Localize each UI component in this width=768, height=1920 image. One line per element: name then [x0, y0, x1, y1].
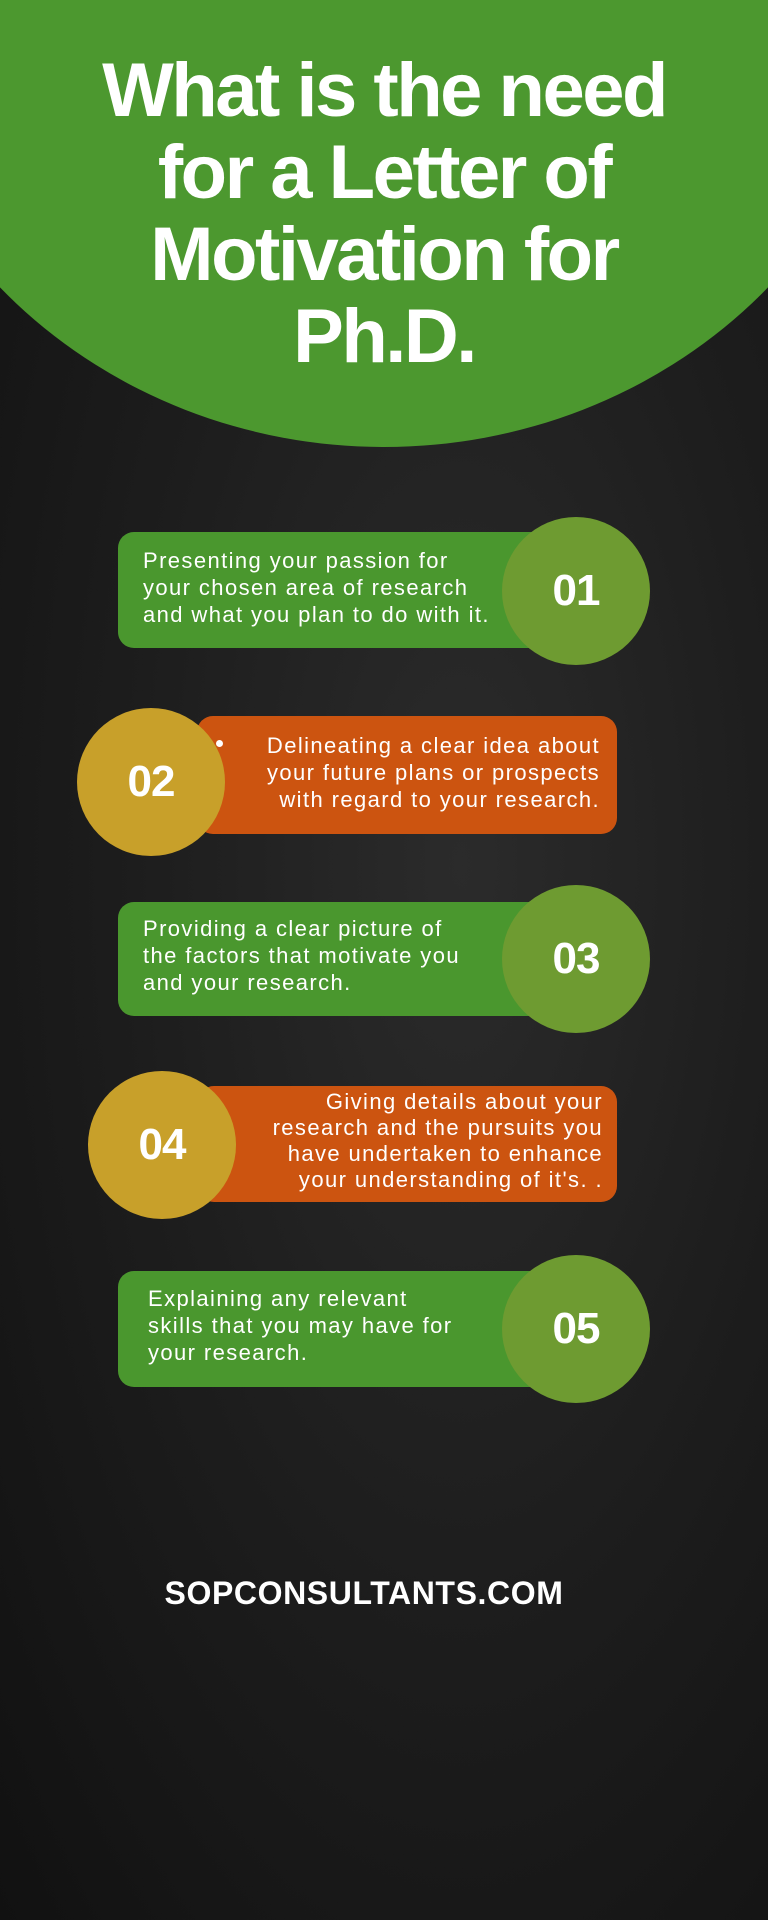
text 3: Providing a clear picture of — [143, 916, 443, 941]
text 3 — [143, 916, 460, 995]
number 04: 04 — [139, 1120, 185, 1169]
number 02: 02 — [128, 757, 174, 806]
number 01 — [502, 517, 650, 665]
number 05: 05 — [553, 1304, 599, 1353]
text 2: Delineating a clear idea about — [267, 733, 600, 758]
text 3: and your research. — [143, 970, 352, 995]
footer website: SOPCONSULTANTS.COM — [165, 1575, 563, 1611]
item 2 — [77, 708, 617, 856]
text 5: your research. — [148, 1340, 308, 1365]
title: What is the need — [102, 48, 666, 133]
text 4 — [273, 1089, 603, 1192]
item 4 — [88, 1071, 617, 1219]
header green ellipse — [0, 0, 768, 447]
text 5: skills that you may have for — [148, 1313, 453, 1338]
title: Motivation for — [150, 212, 618, 297]
text 5: Explaining any relevant — [148, 1286, 408, 1311]
item 3 — [118, 885, 650, 1033]
item 5 — [118, 1255, 650, 1403]
number 05 — [502, 1255, 650, 1403]
number 04 — [88, 1071, 236, 1219]
item 1 — [118, 517, 650, 665]
text 1: and what you plan to do with it. — [143, 602, 490, 627]
title: for a Letter of — [158, 130, 610, 215]
number 02 — [77, 708, 225, 856]
number 01: 01 — [553, 566, 599, 615]
number 03 — [502, 885, 650, 1033]
title: Ph.D. — [293, 294, 475, 379]
text 1: Presenting your passion for — [143, 548, 449, 573]
text 4: research and the pursuits you — [273, 1115, 603, 1140]
text 1: your chosen area of research — [143, 575, 468, 600]
text 3: the factors that motivate you — [143, 943, 460, 968]
text 2 — [267, 733, 600, 812]
text 4: Giving details about your — [326, 1089, 603, 1114]
number 03: 03 — [553, 934, 599, 983]
text 4: your understanding of it's. . — [299, 1167, 603, 1192]
text 4: have undertaken to enhance — [288, 1141, 603, 1166]
text 1 — [143, 548, 490, 627]
text 5 — [148, 1286, 453, 1365]
text 2: your future plans or prospects — [267, 760, 600, 785]
title — [102, 48, 666, 379]
text 2: with regard to your research. — [279, 787, 600, 812]
